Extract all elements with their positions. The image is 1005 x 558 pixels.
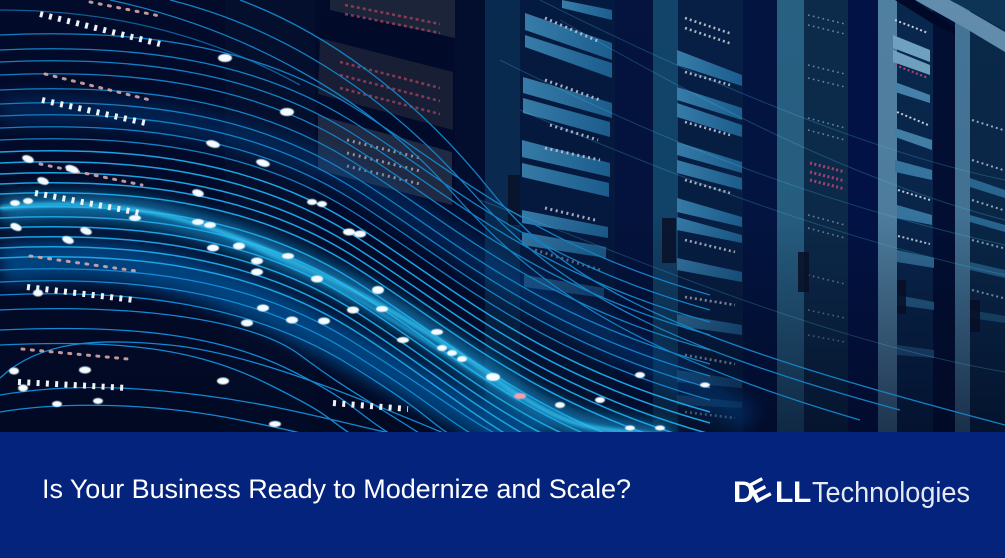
- circuit marks: ticks: [18, 14, 408, 409]
- light streams: fibers, lower: [0, 269, 530, 450]
- logo: Dell Technologies: E: [743, 472, 776, 510]
- rack shelves: column 2: [677, 50, 742, 408]
- rack LEDs: column 1: [535, 18, 600, 270]
- logo: Dell Technologies: L: [793, 476, 811, 509]
- dark LED panels: [318, 0, 455, 205]
- top-right rack frame: [895, 0, 1005, 52]
- logo: Dell Technologies: D: [733, 476, 755, 509]
- streams over racks: [480, 0, 1005, 372]
- light streams: fibers, middle: [0, 151, 710, 463]
- rack LEDs: column 4: [895, 20, 930, 244]
- rack handles: [508, 175, 980, 332]
- logo: Dell Technologies: [733, 472, 970, 510]
- banner background: [0, 432, 1005, 558]
- circuit marks: rings: [22, 2, 160, 359]
- logo: Dell Technologies: L: [775, 476, 793, 509]
- photo: server room background: [0, 0, 1005, 433]
- light streams: bright core: [0, 204, 670, 438]
- light streams: fibers, upper: [0, 0, 1005, 425]
- light particles: [9, 54, 710, 430]
- light streams: glow: [0, 109, 750, 445]
- rack shelves: column 4: [893, 35, 934, 358]
- rack panels: column 3: [808, 15, 845, 342]
- rack shelves: column 1: [522, 0, 612, 298]
- logo: Dell Technologies: Technologies: [812, 477, 970, 509]
- rack LEDs: column 2: [685, 18, 735, 418]
- title: Is Your Business Ready to Modernize and Scale?: [42, 474, 631, 504]
- rack shelves: column 5: [970, 120, 1005, 323]
